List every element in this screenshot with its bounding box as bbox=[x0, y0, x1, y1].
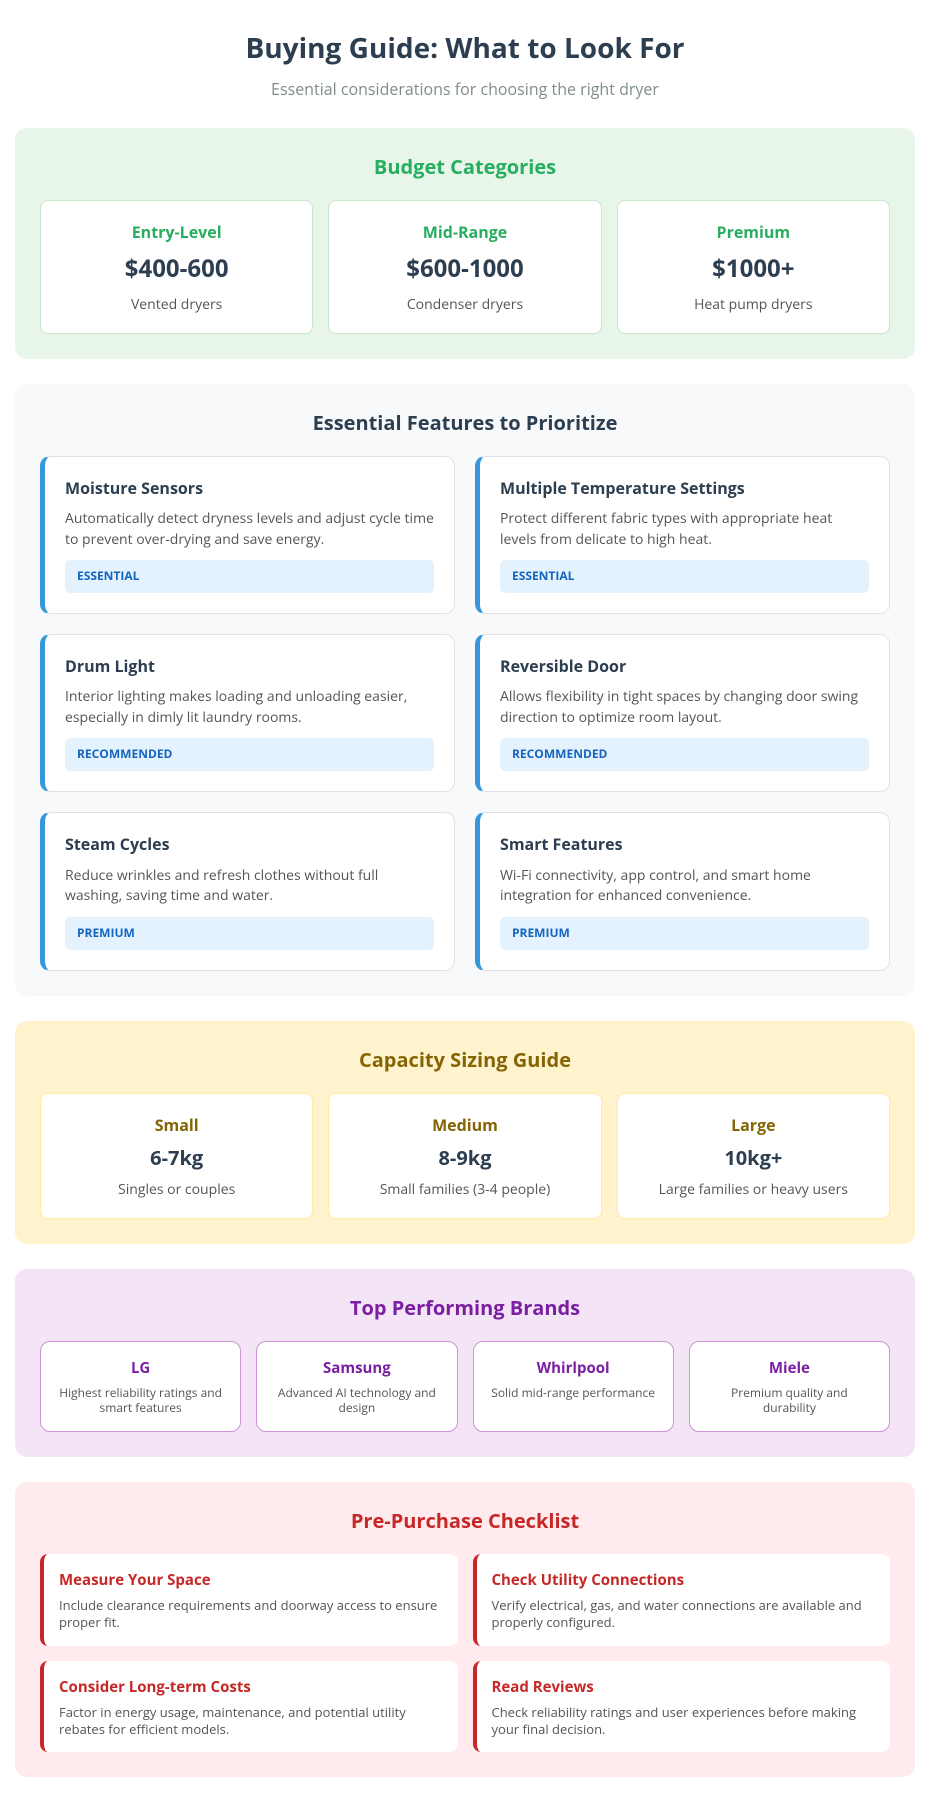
card: drum light: Interior lighting makes loading and unloading easier, bbox=[65, 687, 407, 706]
card: Whirlpool bbox=[472, 1341, 674, 1432]
budget cards bbox=[40, 200, 890, 334]
item: measure your space: proper fit. bbox=[59, 1613, 120, 1631]
card: reversible door: Reversible Door bbox=[500, 655, 626, 677]
item: check utility connections: properly configured. bbox=[492, 1613, 615, 1631]
card: Miele: durability bbox=[763, 1399, 816, 1416]
card: smart features: integration for enhanced convenience. bbox=[500, 886, 751, 905]
card: LG bbox=[40, 1341, 241, 1432]
card: small: Singles or couples bbox=[118, 1180, 235, 1199]
card: Miele bbox=[689, 1341, 890, 1432]
item: check utility connections: Check Utility Connections bbox=[492, 1570, 684, 1590]
panel: capacity sizing guide bbox=[15, 1021, 915, 1244]
item: consider long-term costs: rebates for efficient models. bbox=[59, 1720, 229, 1738]
card: medium: Small families (3-4 people) bbox=[380, 1180, 550, 1199]
card: premium: Heat pump dryers bbox=[694, 295, 813, 314]
item: check utility connections: Verify electrical, gas, and water connections are available and bbox=[492, 1596, 862, 1614]
capacity cards bbox=[40, 1093, 890, 1219]
card: moisture sensors: to prevent over-drying and save energy. bbox=[65, 530, 324, 549]
card: multiple temperature settings bbox=[475, 456, 890, 614]
heading: checklist: Pre-Purchase Checklist bbox=[351, 1507, 579, 1534]
title: Buying Guide: What to Look For bbox=[245, 29, 685, 67]
card: reversible door: direction to optimize room layout. bbox=[500, 708, 722, 727]
card: mid-range: Condenser dryers bbox=[407, 295, 523, 314]
card: large: Large families or heavy users bbox=[659, 1180, 848, 1199]
card: medium: 8-9kg bbox=[438, 1144, 492, 1171]
card: steam cycles: washing, saving time and water. bbox=[65, 886, 273, 905]
card: steam cycles: Steam Cycles bbox=[65, 833, 170, 855]
card: mid-range: Mid-Range bbox=[423, 221, 507, 243]
heading: budget categories: Budget Categories bbox=[374, 153, 556, 180]
item: measure your space: Include clearance requirements and doorway access to ensure bbox=[59, 1596, 437, 1614]
subtitle: Essential considerations for choosing the right dryer bbox=[271, 78, 659, 100]
card: mid-range: $600-1000 bbox=[406, 252, 524, 285]
header bbox=[245, 29, 685, 100]
card: moisture sensors: Moisture Sensors bbox=[65, 477, 203, 499]
card: mid-range bbox=[328, 200, 602, 334]
card: reversible door: Allows flexibility in tight spaces by changing door swing bbox=[500, 687, 858, 706]
card: drum light: especially in dimly lit laundry rooms. bbox=[65, 708, 302, 727]
card: steam cycles: PREMIUM bbox=[77, 924, 135, 941]
card: Whirlpool: Solid mid-range performance bbox=[491, 1384, 655, 1401]
card: reversible door bbox=[475, 634, 890, 792]
feature cards bbox=[40, 456, 890, 971]
panel: pre-purchase checklist bbox=[15, 1482, 915, 1777]
panel: top performing brands bbox=[15, 1269, 915, 1457]
item: measure your space bbox=[40, 1554, 458, 1646]
card: entry-level: Entry-Level bbox=[132, 221, 222, 243]
card: Samsung: Advanced AI technology and bbox=[278, 1384, 436, 1401]
card: LG: smart features bbox=[100, 1399, 182, 1416]
card: drum light bbox=[40, 634, 455, 792]
card: large bbox=[617, 1093, 890, 1219]
card: drum light: RECOMMENDED bbox=[77, 745, 172, 762]
card: steam cycles: Reduce wrinkles and refresh clothes without full bbox=[65, 866, 378, 885]
item: check utility connections bbox=[472, 1554, 890, 1646]
card: moisture sensors bbox=[40, 456, 455, 614]
card: Whirlpool: Whirlpool bbox=[537, 1358, 610, 1378]
item: read reviews: Check reliability ratings and user experiences before making bbox=[492, 1703, 856, 1721]
card: LG: LG bbox=[131, 1358, 150, 1378]
card: small: Small bbox=[155, 1114, 199, 1136]
card: multiple temperature settings: Multiple Temperature Settings bbox=[500, 477, 745, 499]
heading: essential features: Essential Features to Prioritize bbox=[313, 409, 617, 436]
brand cards bbox=[40, 1341, 890, 1432]
card: medium bbox=[328, 1093, 602, 1219]
card: smart features: PREMIUM bbox=[512, 924, 570, 941]
heading: brands: Top Performing Brands bbox=[350, 1294, 580, 1321]
card: Samsung bbox=[256, 1341, 458, 1432]
card: large: 10kg+ bbox=[724, 1144, 782, 1171]
card: premium bbox=[617, 200, 890, 334]
card: drum light: Drum Light bbox=[65, 655, 155, 677]
card: small: 6-7kg bbox=[150, 1144, 203, 1171]
card: LG: Highest reliability ratings and bbox=[59, 1384, 222, 1401]
card: reversible door: RECOMMENDED bbox=[512, 745, 607, 762]
card: moisture sensors: Automatically detect dryness levels and adjust cycle time bbox=[65, 509, 434, 528]
item: consider long-term costs bbox=[40, 1661, 458, 1752]
card: entry-level: $400-600 bbox=[125, 252, 229, 285]
item: read reviews: Read Reviews bbox=[492, 1677, 594, 1697]
panel: essential features bbox=[15, 384, 915, 996]
card: smart features: Wi-Fi connectivity, app control, and smart home bbox=[500, 866, 811, 885]
card: multiple temperature settings: ESSENTIAL bbox=[512, 567, 574, 584]
card: entry-level: Vented dryers bbox=[131, 295, 222, 314]
card: smart features: Smart Features bbox=[500, 833, 623, 855]
item: read reviews: your final decision. bbox=[492, 1720, 605, 1738]
card: large: Large bbox=[731, 1114, 776, 1136]
card: Samsung: Samsung bbox=[323, 1358, 391, 1378]
heading: capacity sizing: Capacity Sizing Guide bbox=[359, 1046, 571, 1073]
card: premium: $1000+ bbox=[712, 252, 794, 285]
card: steam cycles bbox=[40, 812, 455, 971]
panel: budget categories bbox=[15, 128, 915, 359]
card: entry-level bbox=[40, 200, 313, 334]
card: small bbox=[40, 1093, 313, 1219]
card: moisture sensors: ESSENTIAL bbox=[77, 567, 139, 584]
item: consider long-term costs: Factor in energy usage, maintenance, and potential utility bbox=[59, 1703, 406, 1721]
card: multiple temperature settings: Protect different fabric types with appropriate heat bbox=[500, 509, 832, 528]
card: premium: Premium bbox=[717, 221, 790, 243]
card: Miele: Premium quality and bbox=[731, 1384, 848, 1401]
item: read reviews bbox=[472, 1661, 890, 1752]
card: smart features bbox=[475, 812, 890, 971]
card: Samsung: design bbox=[339, 1399, 375, 1416]
item: consider long-term costs: Consider Long-term Costs bbox=[59, 1677, 251, 1697]
checklist items bbox=[40, 1554, 890, 1752]
item: measure your space: Measure Your Space bbox=[59, 1570, 211, 1590]
card: medium: Medium bbox=[432, 1114, 498, 1136]
card: multiple temperature settings: levels from delicate to high heat. bbox=[500, 530, 712, 549]
card: Miele: Miele bbox=[769, 1358, 810, 1378]
